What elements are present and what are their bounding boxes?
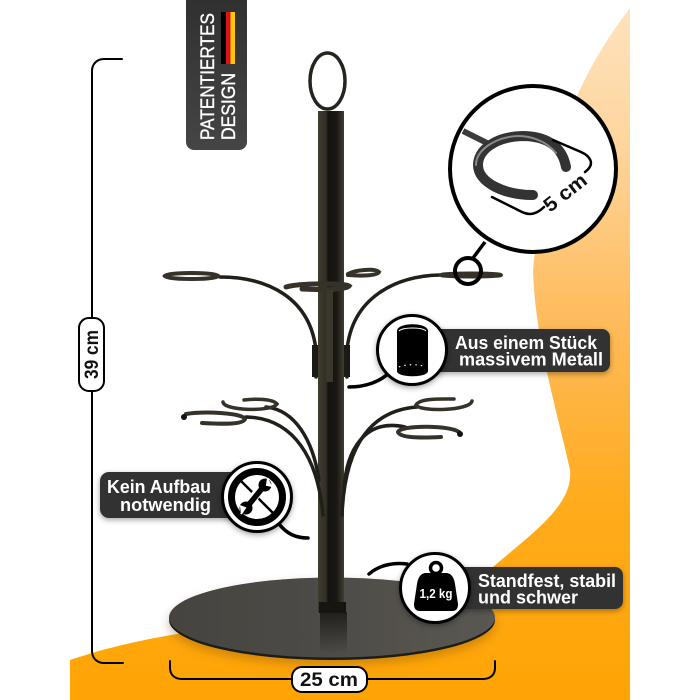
badge text: DESIGN: DESIGN <box>219 73 240 140</box>
width label: 25 cm <box>300 670 358 691</box>
callout: no assembly <box>100 462 308 538</box>
magnifier circle <box>450 86 616 252</box>
pole collar <box>319 602 346 613</box>
label pill <box>430 329 610 372</box>
icon: cylinder <box>397 324 428 376</box>
lower right outer ring <box>416 399 472 410</box>
small marker circle <box>455 258 481 284</box>
dimension: width <box>170 661 495 692</box>
label text: notwendig <box>120 494 211 515</box>
icon: german flag <box>221 12 235 64</box>
lower right outer arm <box>342 407 417 515</box>
connector tail <box>369 563 407 574</box>
stand base disc <box>169 578 495 660</box>
pole reflection on base <box>320 612 347 654</box>
lower left outer ring <box>186 413 245 424</box>
label pill <box>100 472 240 518</box>
label text: Aus einem Stück <box>455 332 598 353</box>
lower left inner ring <box>223 399 277 409</box>
badge: patented design <box>186 0 247 150</box>
width bracket <box>170 661 495 679</box>
height pill <box>79 318 104 391</box>
label text: und schwer <box>478 586 578 608</box>
lower left outer arm <box>246 417 323 515</box>
callout: stable and heavy <box>369 554 623 622</box>
label text: Kein Aufbau <box>107 476 211 497</box>
lower left inner arm <box>266 407 319 480</box>
stand tree <box>164 53 501 654</box>
dimension label: 5 cm <box>540 169 592 217</box>
icon: weight <box>414 562 458 611</box>
front top ring <box>286 284 349 290</box>
arm stub <box>463 131 489 144</box>
height label: 39 cm <box>82 330 103 379</box>
centre pole <box>318 111 344 613</box>
ring closeup <box>476 136 566 195</box>
connector tail <box>279 524 308 538</box>
back top ring <box>348 270 379 276</box>
icon circle <box>222 462 292 532</box>
label text: massivem Metall <box>459 348 603 370</box>
dimension bracket <box>492 140 591 214</box>
width pill <box>292 667 367 692</box>
dimension: height <box>79 59 123 663</box>
orange background shape <box>70 8 630 700</box>
height bracket <box>92 59 123 663</box>
upper right ring <box>441 274 501 276</box>
callout: one piece of solid metal <box>349 316 610 387</box>
lower right inner ring <box>398 427 459 437</box>
lower right inner arm <box>344 425 405 490</box>
top ring <box>310 53 345 109</box>
connector line <box>473 242 485 258</box>
connector tail <box>349 372 390 387</box>
label pill <box>450 567 623 609</box>
icon circle <box>378 316 446 384</box>
icon: crossed out wrench <box>232 472 282 522</box>
upper left arm <box>220 277 316 377</box>
bracket: side plates <box>312 290 350 382</box>
badge text: PATENTIERTES: PATENTIERTES <box>198 13 219 140</box>
label text: Standfest, stabil <box>478 570 616 591</box>
icon: weight: 1,2 kg <box>420 586 453 601</box>
upper right arm <box>347 275 440 377</box>
upper left ring <box>164 273 218 279</box>
callout: 5 cm detail <box>450 86 616 284</box>
icon circle <box>400 554 470 622</box>
